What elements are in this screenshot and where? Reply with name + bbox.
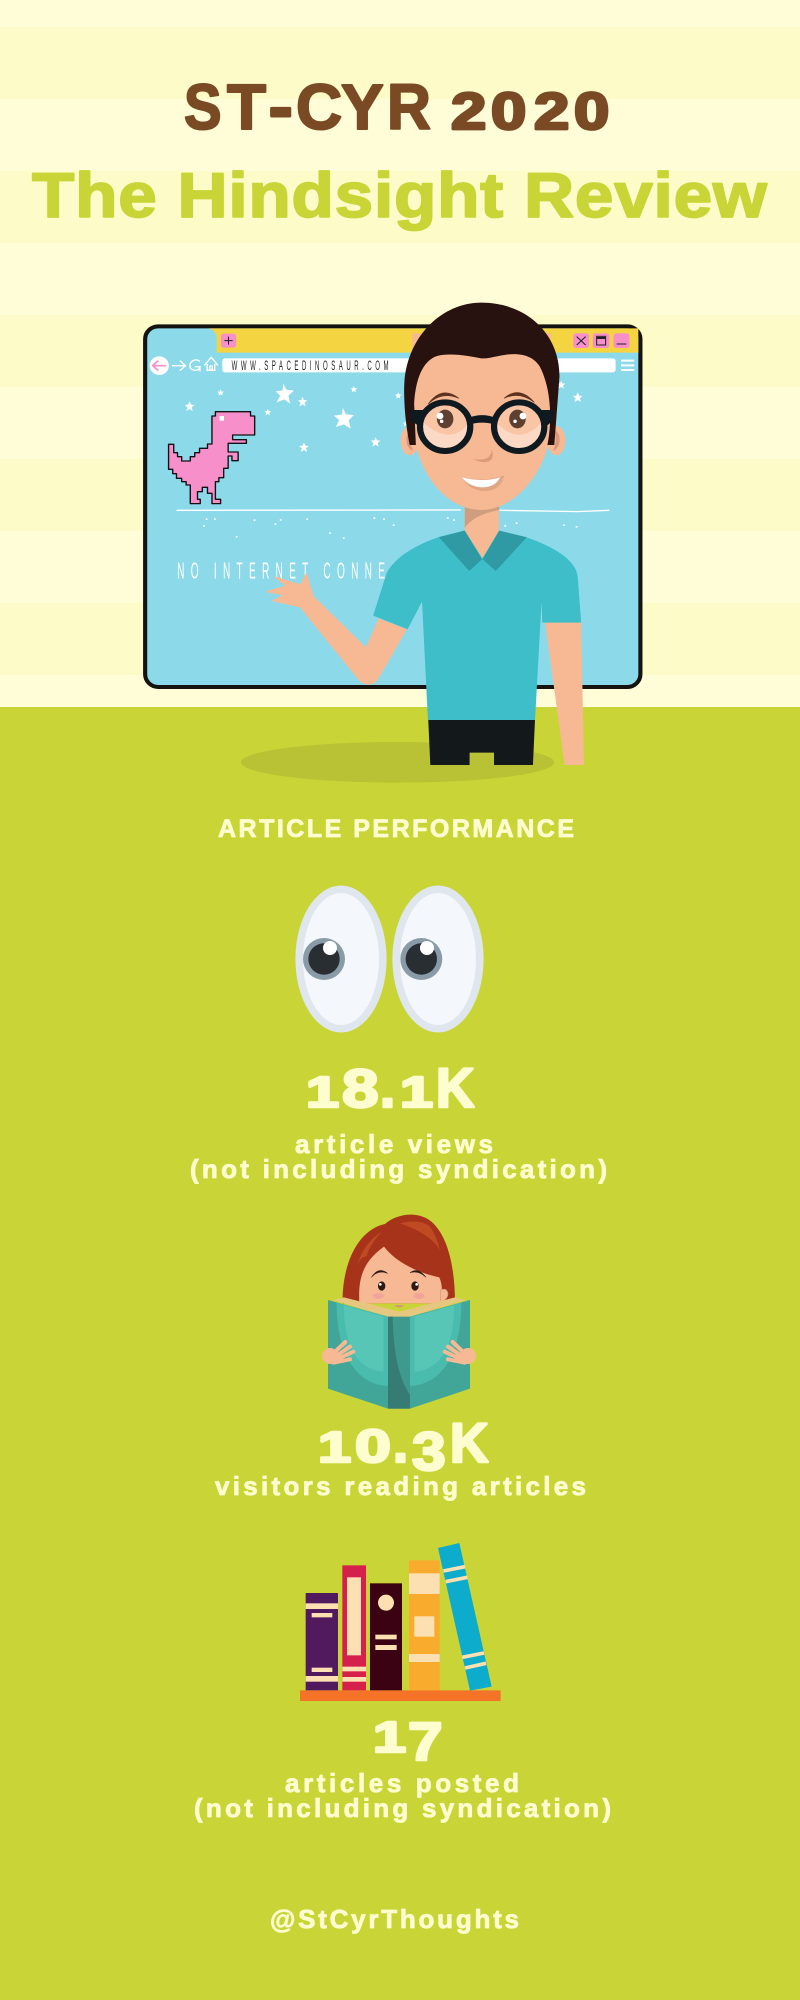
shirt	[373, 531, 581, 720]
hair	[343, 1215, 455, 1303]
purple book	[306, 1593, 338, 1690]
ground line	[176, 510, 609, 512]
title: R	[387, 72, 431, 143]
hands	[322, 1342, 476, 1364]
shelf	[300, 1690, 501, 1701]
hair highlights	[357, 1221, 440, 1267]
stat: 17: 7	[408, 1712, 443, 1772]
title: S	[184, 71, 222, 143]
stars	[185, 381, 583, 452]
stat label: article views: (not including syndication)	[190, 1154, 607, 1184]
orange book	[409, 1560, 440, 1690]
stat: 18.1K: 8	[342, 1058, 379, 1119]
menu icon	[621, 361, 634, 370]
title: 2	[451, 82, 486, 141]
red book	[342, 1565, 366, 1690]
stat: 17	[373, 1712, 443, 1772]
icon: pixel dinosaur	[169, 412, 255, 504]
stat: 10.3K: 1	[318, 1423, 351, 1472]
neck	[465, 507, 499, 558]
mouth	[462, 475, 504, 491]
stat: 18.1K: .	[380, 1059, 395, 1119]
new tab button	[221, 334, 236, 348]
stat label: article views: article views	[295, 1129, 493, 1159]
glasses	[411, 401, 553, 451]
face	[359, 1247, 442, 1303]
eyebrows	[428, 393, 534, 404]
ground shadow	[241, 742, 554, 783]
face	[412, 333, 551, 510]
stat: 18.1K	[306, 1057, 474, 1119]
collar	[439, 531, 527, 571]
heading: article performance: ARTICLE PERFORMANCE	[218, 815, 574, 843]
title: 2	[534, 82, 569, 141]
stat label: visitors reading articles: visitors reading articles	[215, 1471, 586, 1501]
title	[184, 71, 609, 143]
address bar: WWW.SPACEDINOSAUR.COM	[232, 358, 389, 374]
book	[328, 1300, 470, 1409]
far arm	[545, 622, 584, 765]
ear	[441, 1289, 448, 1301]
browser tab bar	[209, 328, 638, 353]
hand	[267, 574, 313, 607]
title: T	[227, 71, 266, 143]
navigation icons	[150, 356, 218, 375]
icon: person reading a book	[322, 1215, 476, 1409]
shorts	[428, 719, 535, 765]
near arm	[299, 595, 407, 685]
stat: 10.3K: .	[393, 1414, 408, 1474]
title: 0	[574, 82, 609, 141]
stat: 10.3K: 3	[412, 1422, 446, 1482]
stat: 10.3K: 0	[355, 1420, 391, 1472]
window buttons	[573, 333, 629, 348]
no internet message: NO INTERNET CONNECTION	[177, 558, 448, 584]
stat: 10.3K: K	[450, 1412, 488, 1474]
stat label: article views	[190, 1129, 607, 1184]
stat: 17: 1	[373, 1713, 406, 1762]
title: 0	[491, 82, 526, 141]
book pages	[333, 1297, 466, 1317]
stat: 18.1K: 1	[306, 1068, 339, 1117]
facial features	[371, 1270, 426, 1307]
title: -	[269, 72, 292, 143]
blue leaning book	[438, 1543, 492, 1691]
stat: 18.1K: K	[436, 1057, 474, 1119]
stat label: articles posted: articles posted	[285, 1768, 519, 1798]
title: C	[296, 71, 342, 143]
stat label: articles posted	[194, 1768, 611, 1823]
nose	[473, 449, 493, 462]
hair	[404, 303, 559, 445]
title: Y	[341, 71, 384, 143]
ground dots	[203, 517, 577, 539]
address bar	[222, 358, 616, 374]
subtitle: The Hindsight Review	[32, 161, 767, 231]
man character	[267, 303, 584, 765]
stat label: articles posted: (not including syndication)	[194, 1793, 611, 1823]
stat: 10.3K	[318, 1412, 488, 1482]
icon: books on a shelf	[300, 1543, 501, 1701]
ears	[401, 426, 565, 455]
dark book	[370, 1583, 402, 1690]
footer handle: @StCyrThoughts	[270, 1904, 519, 1934]
icon: eyes	[295, 886, 484, 1032]
illustration: browser window and man	[145, 303, 640, 783]
stat: 18.1K: 1	[400, 1068, 433, 1117]
panel: browser window	[145, 326, 640, 687]
